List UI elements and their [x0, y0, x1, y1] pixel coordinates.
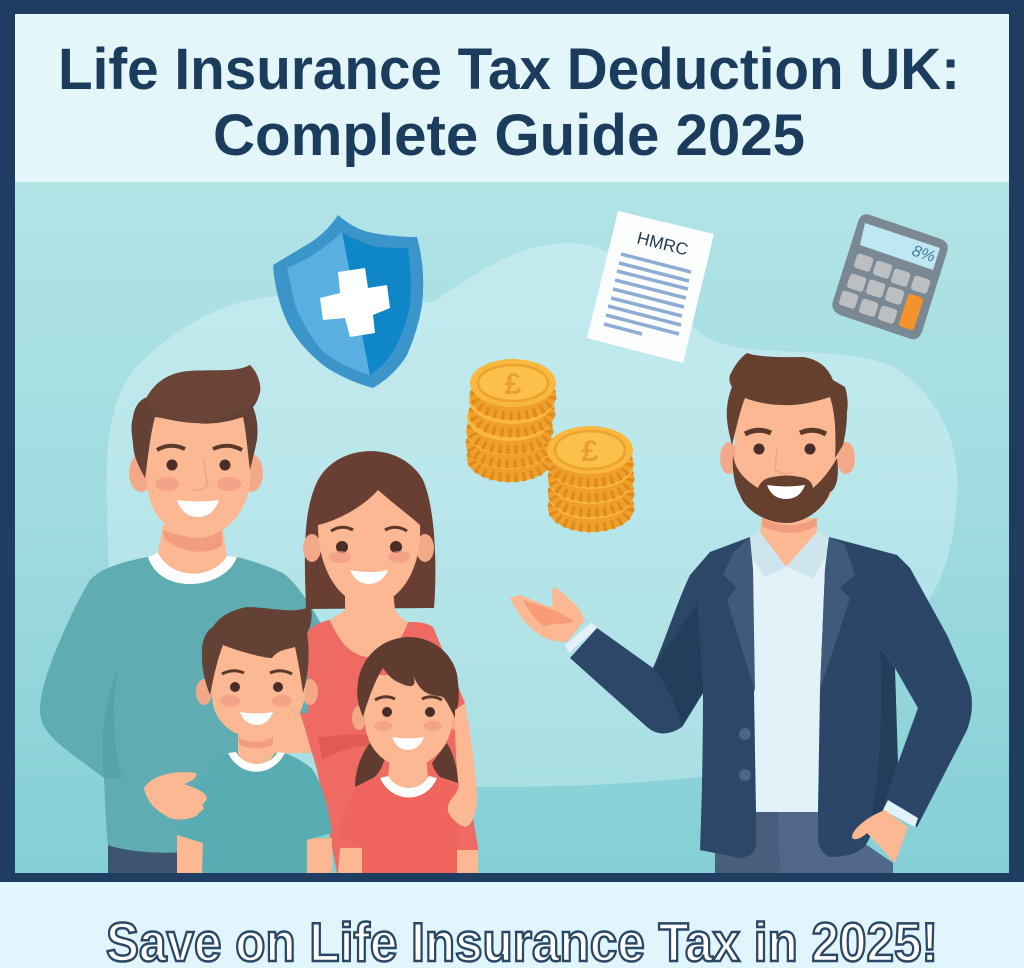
coin stack left [466, 359, 556, 482]
girl smile [392, 737, 424, 750]
father hand on boy [144, 772, 207, 820]
adviser nose [775, 448, 793, 474]
adviser cuffs [565, 622, 918, 827]
father cheeks [155, 477, 241, 491]
boy smile [240, 712, 273, 725]
icon: pound coin stacks [466, 359, 634, 532]
mother arm and hand [448, 703, 477, 827]
adviser face [735, 395, 838, 520]
boy face [212, 640, 305, 738]
adviser jacket right [818, 537, 972, 857]
father nose [192, 458, 208, 490]
boy eyes [222, 671, 292, 692]
title line 2: Complete Guide 2025 [213, 103, 805, 168]
mother arm behind boy [273, 713, 316, 753]
adviser lapels [723, 537, 855, 692]
adviser neck and collar [760, 518, 817, 567]
girl hair [357, 637, 459, 718]
girl eyes [375, 697, 442, 717]
adviser beard [733, 455, 838, 523]
girl neck and collar [388, 755, 428, 791]
girl arms [338, 848, 478, 873]
icon: shield [273, 215, 423, 388]
icon: calculator: 8% [910, 243, 937, 266]
father smile [177, 500, 219, 517]
icon: HMRC document: HMRC [635, 228, 690, 259]
person: girl [338, 637, 478, 873]
girl ears [352, 706, 366, 730]
mother face [318, 490, 420, 606]
panel: illustration scene [15, 182, 1009, 873]
adviser hair [727, 353, 848, 458]
adviser shirt [752, 540, 826, 812]
mother top [300, 620, 478, 873]
boy skin arms [177, 835, 332, 873]
boy cheeks [220, 695, 292, 707]
person: adviser [510, 353, 972, 873]
girl shirt [338, 778, 460, 873]
mother eyes [331, 527, 407, 553]
adviser ears [720, 442, 738, 474]
father hair [132, 365, 260, 478]
icon: HMRC document [587, 211, 714, 363]
boy neck and collar [238, 735, 275, 766]
father neck [158, 525, 227, 578]
icon: calculator [832, 214, 948, 339]
boy ears [196, 679, 212, 705]
mother smile [350, 570, 388, 584]
father trousers [108, 840, 180, 873]
panel: footer [0, 882, 1024, 968]
adviser trousers [715, 812, 893, 873]
person: boy [177, 606, 332, 873]
father face [147, 410, 250, 538]
coin stack right [547, 426, 634, 532]
adviser smile [767, 485, 805, 499]
girl cheeks [374, 721, 442, 731]
panel: title banner [15, 14, 1009, 182]
father collar [148, 553, 237, 584]
adviser hip hand [852, 810, 908, 863]
mother neck [330, 590, 408, 657]
adviser jacket buttons [739, 728, 751, 781]
girl pigtails [355, 743, 458, 787]
boy shirt [177, 753, 332, 873]
coin stack left: £ [505, 368, 522, 401]
mother cheeks [329, 551, 410, 563]
mother ears [303, 534, 321, 562]
adviser pointing hand [510, 587, 585, 642]
boy hair [202, 606, 312, 695]
mother hair back [305, 451, 435, 609]
girl face [365, 675, 453, 767]
coin stack right: £ [582, 435, 599, 468]
title line 1: Life Insurance Tax Deduction UK: [58, 37, 960, 102]
adviser jacket left [570, 537, 756, 858]
father ears [129, 454, 153, 492]
person: mother [273, 451, 478, 873]
father sweater [40, 557, 320, 853]
person: father [40, 365, 320, 873]
adviser eyes [745, 430, 826, 454]
frame bottom bar [0, 873, 1024, 882]
father eyes and brows [157, 446, 242, 470]
